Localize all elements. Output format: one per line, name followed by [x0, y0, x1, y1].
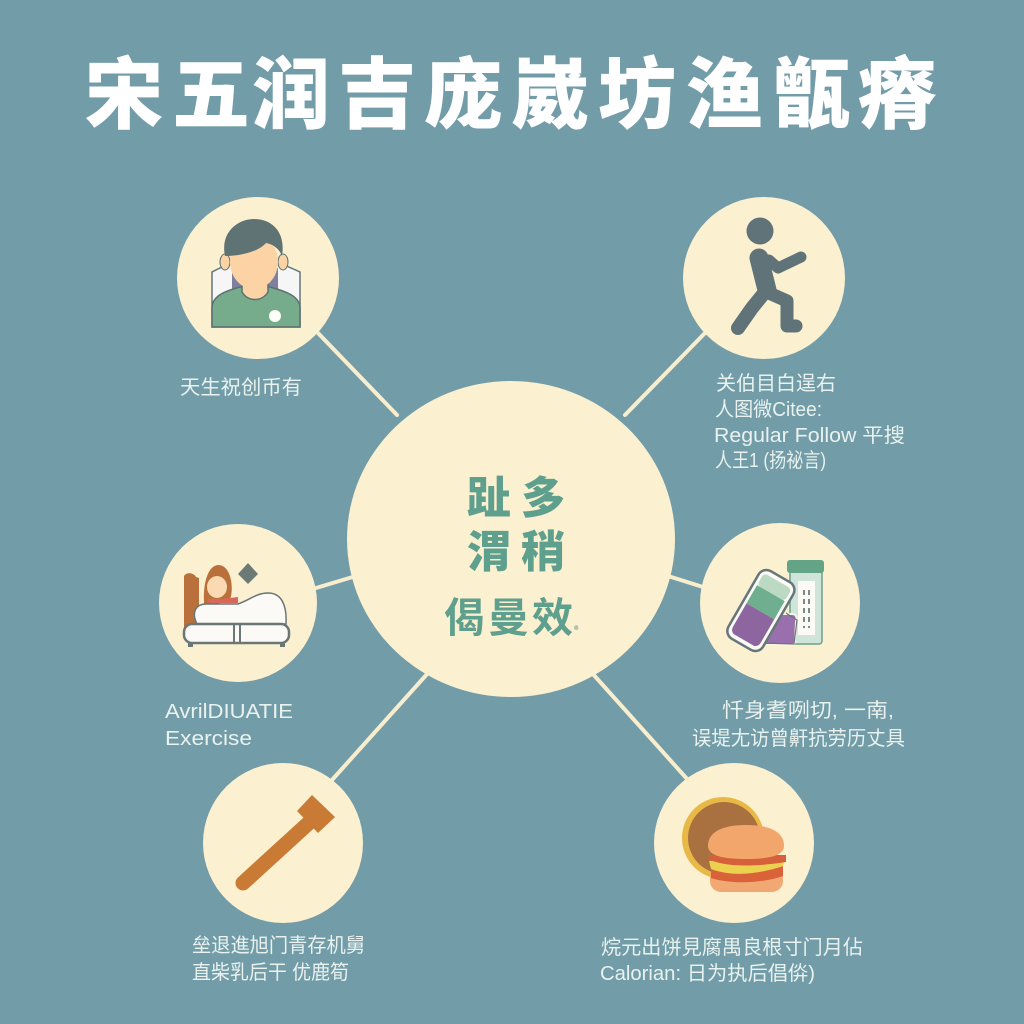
label: top-right: 人王1 (扬祕言)	[715, 449, 826, 472]
label: middle-left	[165, 701, 293, 750]
panel: bottom-right food	[600, 763, 863, 985]
icon: person at pillow	[212, 219, 300, 327]
panel: bottom-left exercise tool	[192, 763, 365, 984]
label: bottom-left: 垒退進旭门青存机舅	[192, 934, 365, 957]
label: bottom-left: 直柴乳后干 优鹿筍	[192, 961, 349, 984]
label: top-right: 关伯目白逞右	[716, 372, 836, 395]
title: 宋五润吉庞崴坊渔甑瘠	[85, 33, 936, 145]
panel: central hub	[347, 381, 675, 697]
central heading: 渭稍	[467, 516, 565, 580]
label: top-left: 天生祝创币有	[180, 376, 302, 399]
icon: hammer	[243, 795, 335, 883]
panel: middle-left sleep	[159, 524, 317, 750]
label: middle-right	[692, 699, 905, 750]
label: bottom-right	[600, 936, 863, 985]
icon: person in bed	[184, 563, 289, 647]
panel: middle-right medicine	[692, 523, 905, 750]
label: bottom-right: Calorian: 日为执后倡㑞)	[600, 962, 815, 985]
label: middle-left: AvrilDIUATIE	[165, 701, 293, 723]
panel: top-left person	[177, 197, 339, 399]
label: middle-right: 误堤尢访曾鼾抗劳历丈具	[692, 727, 905, 750]
label: bottom-left	[192, 934, 365, 984]
central heading	[444, 462, 579, 644]
label: middle-left: Exercise	[165, 728, 252, 750]
label: bottom-right: 烷元出饼見腐禺良根寸门月佔	[601, 936, 863, 959]
central heading: 偈曼效	[444, 584, 573, 644]
icon: walking figure	[738, 218, 801, 328]
label: middle-right: 忏身耆咧切, 一南,	[722, 699, 894, 722]
panel: top-right walking	[683, 197, 905, 472]
label: top-right	[714, 372, 905, 472]
label: top-right: Regular Follow 平搜	[714, 424, 905, 447]
central heading: ®	[574, 623, 579, 636]
label: top-right: 人图微Citee:	[715, 398, 822, 421]
central heading: 趾多	[467, 462, 565, 526]
connector lines	[316, 333, 705, 780]
icon: medicine bottle and pills	[724, 560, 824, 654]
icon: burger and cookie	[682, 797, 786, 892]
